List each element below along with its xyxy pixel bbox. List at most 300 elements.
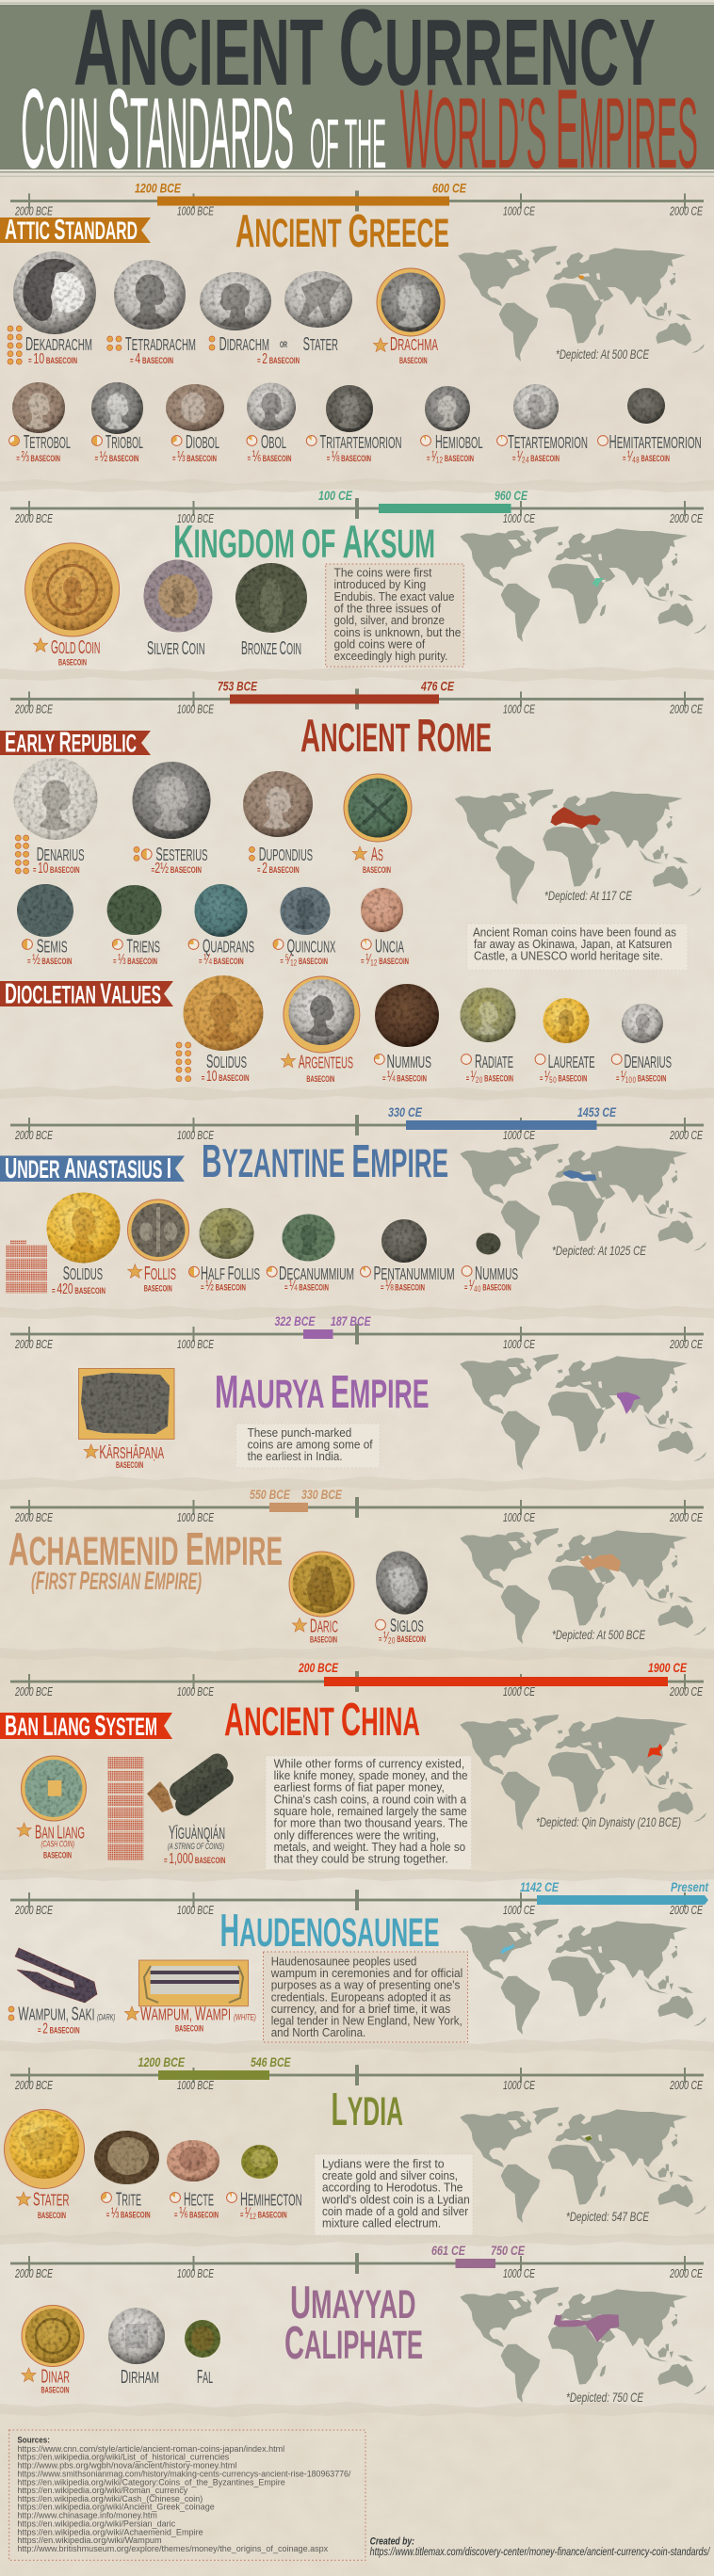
timeline: Achaemenid: 1000 CE — [503, 1511, 535, 1524]
coin: Denarius (Diocletian): DENARIUS — [624, 1052, 672, 1072]
coin: Quadrans: QUADRANS — [203, 936, 254, 957]
coin: Triobol: = ½ BASECOIN — [95, 449, 139, 465]
coin: Solidus = 420 basecoin — [6, 1192, 121, 1297]
coin: Tetartemorion: = ¹⁄₂₄ BASECOIN — [512, 449, 560, 465]
title banner: OF THE — [310, 105, 386, 183]
timeline: Byzantine: 1453 CE — [577, 1104, 616, 1119]
coin: Stater, basecoin: BASECOIN — [38, 2211, 66, 2221]
coin: Hecte: = ⅙ BASECOIN — [174, 2206, 219, 2222]
subheading: First Persian Empire: (FIRST PERSIAN EMPIRE) — [31, 1566, 202, 1595]
coin: Trite — [94, 2131, 159, 2222]
world map: China — [460, 1715, 706, 1830]
coin: Didrachm or Stater: DIDRACHM — [219, 334, 269, 355]
panel: Umayyad Caliphate — [10, 2243, 706, 2405]
coin: Hemiobol — [421, 386, 483, 465]
coin: As, basecoin: AS — [371, 845, 383, 865]
timeline: Haudenosaunee: 2000 BCE — [14, 1904, 53, 1917]
heading: Achaemenid Empire: ACHAEMENID EMPIRE — [8, 1524, 283, 1575]
coin: Fal: FAL — [197, 2367, 213, 2388]
timeline: China: 2000 BCE — [14, 1685, 53, 1699]
timeline: Umayyad: 750 CE — [491, 2243, 526, 2258]
text block: China note — [266, 1756, 471, 1870]
sources list: https://en.wikipedia.org/wiki/Cash_(Chinese_coin) — [17, 2494, 203, 2504]
coin: Dinar, basecoin: BASECOIN — [41, 2386, 70, 2396]
timeline: Lydia: 546 BCE — [251, 2054, 291, 2069]
timeline: Aksum: 960 CE — [495, 488, 527, 503]
coin: Bronze Coin: BRONZE COIN — [241, 638, 301, 659]
coin: Ban Liang, basecoin: BAN LIANG — [35, 1823, 85, 1843]
coin: Quincunx — [273, 887, 336, 968]
world map: Lydia — [460, 2107, 706, 2224]
wampum: Saki (dark): WAMPUM, SAKI — [18, 2004, 95, 2025]
coin: Obol: = ⅙ BASECOIN — [248, 449, 292, 465]
timeline: China: 200 BCE — [298, 1660, 338, 1675]
banner: Under Anastasius I: UNDER ANASTASIUS I — [5, 1151, 171, 1184]
coin: Nummus: NUMMUS — [386, 1052, 431, 1072]
timeline: Maurya: 1000 BCE — [177, 1338, 214, 1351]
coin: As, basecoin: BASECOIN — [363, 865, 391, 876]
timeline: Achaemenid: 330 BCE — [301, 1487, 342, 1502]
coin: Yiguanqian, string of coins: (A STRING OF COINS) — [168, 1842, 224, 1852]
coin: Yiguanqian, string of coins — [147, 1750, 237, 1867]
coin: Drachma, basecoin — [373, 268, 445, 366]
coin: Solidus = 420 basecoin: = 420 BASECOIN — [52, 1281, 105, 1297]
text block: China note: earliest forms of fiat paper money, — [274, 1780, 445, 1795]
coin: Uncia: UNCIA — [375, 936, 404, 957]
world map: Byzantine: *Depicted: At 1025 CE — [552, 1243, 646, 1258]
heading: Umayyad Caliphate: CALIPHATE — [284, 2318, 423, 2369]
timeline: Lydia — [10, 2054, 704, 2092]
text block: Lydia note: Lydians were the first to — [322, 2156, 445, 2170]
coin: Half Follis: = ½ BASECOIN — [201, 1279, 246, 1295]
panel: Ancient Rome — [0, 678, 704, 1086]
coin: Nummus — [374, 984, 439, 1086]
coin: Ban Liang, basecoin: (CASH COIN) — [41, 1840, 74, 1850]
heading: Umayyad Caliphate: UMAYYAD — [290, 2278, 416, 2328]
timeline: Aksum: 1000 BCE — [177, 512, 214, 525]
coin: Tetradrachm: TETRADRACHM — [125, 334, 196, 355]
timeline: Achaemenid — [10, 1487, 704, 1524]
coin: Dinar, basecoin — [22, 2305, 84, 2396]
coin: Hecte: HECTE — [184, 2190, 214, 2211]
coin: Solidus: = 10 BASECOIN — [202, 1069, 250, 1085]
coin: Follis, basecoin — [128, 1199, 188, 1295]
coin: Argenteus, basecoin: ARGENTEUS — [299, 1053, 353, 1073]
text block: Rome note: Ancient Roman coins have been found as — [473, 925, 676, 939]
coin: Dekadrachm: DEKADRACHM — [25, 334, 92, 355]
panel: Ancient Greece — [0, 181, 705, 465]
wampum: Wampi (white), basecoin: (WHITE) — [234, 2013, 256, 2023]
sources list: https://en.wikipedia.org/wiki/Roman_currency — [17, 2486, 188, 2496]
timeline: Umayyad: 1000 CE — [503, 2267, 535, 2280]
sources list: https://en.wikipedia.org/wiki/Ancient_Greek_coinage — [17, 2503, 215, 2513]
coin: Decanummium: DECANUMMIUM — [279, 1264, 354, 1284]
timeline: Achaemenid: 2000 BCE — [14, 1511, 53, 1524]
banner: Ban Liang System: BAN LIANG SYSTEM — [5, 1709, 157, 1742]
sources list: https://en.wikipedia.org/wiki/Persian_daric — [17, 2520, 175, 2530]
world map: Greece — [458, 246, 705, 362]
coin: Semis: = ½ BASECOIN — [27, 952, 72, 968]
text block: China note: for more than two thousand years. The — [274, 1816, 468, 1830]
banner: Attic Standard: ATTIC STANDARD — [5, 213, 138, 246]
timeline: Byzantine: 330 CE — [388, 1104, 423, 1119]
sources list: https://en.wikipedia.org/wiki/Wampum — [17, 2536, 162, 2546]
timeline: Lydia: 1000 BCE — [177, 2079, 214, 2092]
timeline: Haudenosaunee: 1000 BCE — [177, 1904, 214, 1917]
coin: Karshapana: BASECOIN — [116, 1460, 143, 1471]
coin: Hemitartemorion — [598, 388, 702, 465]
coin: Nummus: = ¼ BASECOIN — [382, 1070, 427, 1086]
coin: Dirham: DIRHAM — [121, 2367, 159, 2388]
timeline: Umayyad: 1000 BCE — [177, 2267, 214, 2280]
timeline: Umayyad — [10, 2243, 704, 2280]
sources list: https://en.wikipedia.org/wiki/Category:Coins_of_the_Byzantines_Empire — [17, 2477, 285, 2487]
text block: China note: that they could be strung together. — [274, 1852, 448, 1866]
text block: China note: square hole, remained largely the same — [274, 1804, 467, 1818]
coin: Nummus (Byzantine) — [462, 1233, 518, 1295]
coin: Half Follis: HALF FOLLIS — [201, 1264, 260, 1284]
heading: Kingdom of Aksum: KINGDOM OF AKSUM — [173, 517, 435, 568]
world map: Achaemenid: *Depicted: At 500 BCE — [552, 1627, 645, 1642]
heading: Ancient China: ANCIENT CHINA — [224, 1695, 420, 1746]
timeline: Lydia: 2000 BCE — [14, 2079, 53, 2092]
sources list — [17, 2444, 351, 2554]
timeline: Rome: 1000 CE — [503, 702, 535, 716]
text block: Aksum note: gold, silver, and bronze — [333, 613, 445, 627]
coin: Hecte — [167, 2140, 219, 2222]
coin: Diobol: = ⅓ BASECOIN — [172, 449, 217, 465]
wampum: Wampi (white), basecoin: WAMPUM, WAMPI — [140, 2004, 231, 2025]
coin: Solidus: SOLIDUS — [206, 1052, 247, 1072]
timeline: Byzantine: 1000 CE — [503, 1129, 535, 1142]
coin: Obol: OBOL — [261, 432, 286, 453]
text block: Lydia note: according to Herodotus. The — [322, 2181, 462, 2195]
timeline: China: 1900 CE — [648, 1660, 687, 1675]
coin: Ban Liang, basecoin — [17, 1756, 87, 1861]
panel: Kingdom of Aksum — [10, 488, 706, 668]
world map: Umayyad — [460, 2287, 706, 2405]
text block: China note: only differences were the writing, — [274, 1827, 439, 1842]
text block: Aksum note: gold coins were of — [333, 636, 426, 652]
sources list: https://en.wikipedia.org/wiki/List_of_historical_currencies — [17, 2453, 230, 2463]
timeline: Ancient Greece: 1000 CE — [503, 205, 535, 218]
wampum: Saki (dark) — [8, 1948, 115, 2037]
coin: Silver Coin — [143, 559, 213, 659]
coin: Didrachm or Stater: STATER — [303, 334, 338, 355]
timeline: Aksum: 100 CE — [318, 488, 353, 503]
coin: Stater, basecoin — [4, 2109, 85, 2221]
coin: Quadrans — [188, 884, 254, 968]
panel: sources — [9, 2430, 365, 2560]
text block: China note: China's cash coins, a round coin with a — [274, 1792, 467, 1806]
text block: Haudenosaunee note: and North Carolina. — [271, 2025, 365, 2039]
timeline: China — [10, 1660, 704, 1699]
coin: As, basecoin — [344, 774, 412, 876]
sources list: http://www.chinasage.info/money.htm — [17, 2511, 157, 2521]
text block: Aksum note: coins is unknown, but the — [333, 625, 462, 639]
coin: Quadrans: = ¼ BASECOIN — [199, 952, 244, 968]
coin: Siglos: = ¹⁄₂₀ BASECOIN — [379, 1630, 426, 1646]
coin: Karshapana — [79, 1369, 174, 1471]
coin: Gold Coin — [25, 543, 120, 668]
coin: Triobol — [91, 382, 143, 465]
timeline: Aksum: 1000 CE — [503, 512, 535, 525]
coin: Bronze Coin — [235, 563, 307, 659]
banner: Diocletian Values: DIOCLETIAN VALUES — [5, 977, 161, 1009]
panel: Haudenosaunee — [8, 1879, 709, 2042]
text block: Aksum note: introduced by King — [333, 577, 426, 591]
chart: 1,000 basecoin grid — [108, 1757, 143, 1860]
heading: Ancient Greece: ANCIENT GREECE — [235, 206, 449, 257]
timeline: China: 1000 CE — [503, 1685, 535, 1699]
panel: Maurya Empire — [10, 1313, 706, 1471]
wampum: Saki (dark): (DARK) — [97, 2013, 115, 2023]
coin: Hemiobol: HEMIOBOL — [435, 432, 483, 453]
coin: Dupondius — [243, 771, 313, 877]
coin: Denarius — [13, 758, 98, 877]
text block: Haudenosaunee note: wampum in ceremonies and for official — [270, 1966, 462, 1980]
coin: Gold Coin: BASECOIN — [58, 657, 87, 668]
coin: Radiate: = ¹⁄₂₀ BASECOIN — [466, 1070, 513, 1086]
timeline: Rome: 1000 BCE — [177, 702, 214, 716]
sources list: https://en.wikipedia.org/wiki/Achaemenid_Empire — [17, 2527, 203, 2537]
text block: Haudenosaunee note: currency, and for a brief time, it was — [271, 2002, 451, 2016]
coin: Daric, basecoin — [289, 1552, 354, 1646]
coin: Yiguanqian, string of coins: YĪGUÀNQIÁN — [169, 1823, 225, 1843]
timeline: Haudenosaunee — [10, 1879, 709, 1917]
coin: Semis: SEMIS — [37, 936, 68, 957]
timeline: Achaemenid: 1000 BCE — [177, 1511, 214, 1524]
coin: Tetrobol: TETROBOL — [24, 432, 71, 453]
coin: Nummus (Byzantine): NUMMUS — [475, 1264, 518, 1284]
timeline: Maurya: 322 BCE — [275, 1313, 316, 1328]
timeline: Umayyad: 2000 BCE — [14, 2267, 53, 2280]
coin: Hemihecton: = ¹⁄₁₂ BASECOIN — [240, 2206, 287, 2222]
coin: Karshapana: KĀRSHĀPAṆA — [99, 1442, 164, 1463]
coin: Quincunx: QUINCUNX — [287, 936, 336, 957]
timeline: Rome: 476 CE — [420, 678, 454, 693]
coin: Diobol — [166, 384, 224, 465]
text block: Haudenosaunee note: Haudenosaunee peoples used — [271, 1954, 416, 1968]
coin: Yiguanqian, string of coins: = 1,000 BASECOIN — [164, 1851, 225, 1867]
coin: Laureate: LAUREATE — [548, 1052, 595, 1072]
coin: Siglos — [369, 1545, 434, 1646]
timeline: Maurya: 187 BCE — [331, 1313, 371, 1328]
text block: Haudenosaunee note — [264, 1952, 467, 2042]
timeline: Lydia: 1000 CE — [503, 2079, 535, 2092]
coin: Semis — [17, 884, 73, 968]
coin: Triens — [107, 885, 162, 968]
world map: Achaemenid — [460, 1528, 706, 1644]
text block: Maurya note — [235, 1424, 380, 1468]
timeline: Haudenosaunee: 1142 CE — [520, 1879, 560, 1894]
text block: Aksum note: of the three issues of — [333, 601, 441, 616]
text block: Lydia note: world's oldest coin is a Lydian — [321, 2192, 470, 2206]
text block: Maurya note: the earliest in India. — [248, 1449, 343, 1463]
timeline: Byzantine: 2000 BCE — [14, 1129, 53, 1142]
coin: Dupondius: DUPONDIUS — [259, 845, 313, 865]
sources list: https://www.cnn.com/style/article/ancient-roman-coins-japan/index.html — [17, 2444, 284, 2455]
world map: Roman Empire: *Depicted: At 117 CE — [544, 888, 632, 903]
timeline: Rome — [10, 678, 704, 716]
timeline: Maurya: 1000 CE — [503, 1338, 535, 1351]
coin: Tritartemorion: TRITARTEMORION — [320, 432, 401, 453]
coin: Uncia: = ¹⁄₁₂ BASECOIN — [361, 952, 409, 968]
coin: Decanummium — [267, 1215, 354, 1295]
timeline: Maurya: 2000 BCE — [14, 1338, 53, 1351]
coin: Triobol: TRIOBOL — [105, 432, 143, 453]
coin: Drachma, basecoin: BASECOIN — [399, 356, 428, 366]
coin: Didrachm or Stater: = 2 BASECOIN — [257, 351, 300, 367]
world map: Greece: *Depicted: At 500 BCE — [556, 346, 649, 362]
coin: Trite: TRITE — [116, 2190, 141, 2211]
coin: Tetrobol — [9, 382, 71, 465]
sources list: http://www.pbs.org/wgbh/nova/ancient/history-money.html — [17, 2461, 236, 2471]
timeline: Maurya — [10, 1313, 704, 1351]
coin: Denarius (Diocletian): = ¹⁄₁₀₀ BASECOIN — [616, 1070, 666, 1086]
timeline: Haudenosaunee: 1000 CE — [503, 1904, 535, 1917]
panel: Ancient China — [0, 1660, 706, 1870]
text block: Haudenosaunee note: legal tender in New England, New York, — [271, 2013, 462, 2027]
wampum: Wampi (white), basecoin: BASECOIN — [175, 2024, 203, 2035]
text block: Lydia note: mixture called electrum. — [322, 2215, 441, 2230]
panel: Byzantine Empire — [0, 1104, 706, 1297]
timeline: Ancient Greece — [10, 181, 704, 218]
world map: Roman Empire — [455, 789, 701, 905]
timeline: Aksum — [10, 488, 704, 525]
wampum: Saki (dark): = 2 BASECOIN — [38, 2021, 80, 2037]
timeline: Rome: 753 BCE — [218, 678, 257, 693]
timeline: Ancient Greece: 600 CE — [432, 181, 467, 196]
panel: Achaemenid Empire — [8, 1487, 706, 1646]
text block: Haudenosaunee note: purposes as a way of presenting one's — [271, 1978, 461, 1992]
coin: Hemiobol: = ¹⁄₁₂ BASECOIN — [427, 449, 474, 465]
text block: Haudenosaunee note: credentials. Europeans adopted it as — [271, 1989, 451, 2004]
timeline: Umayyad: 661 CE — [431, 2243, 466, 2258]
coin: Tetartemorion: TETARTEMORION — [508, 432, 588, 453]
sources list: http://www.britishmuseum.org/explore/themes/money/the_origins_of_coinage.aspx — [17, 2544, 328, 2554]
world map: Umayyad: *Depicted: 750 CE — [566, 2390, 643, 2405]
timeline: Rome: 2000 BCE — [14, 702, 53, 716]
coin: Dinar, basecoin: DINAR — [41, 2367, 70, 2388]
text block: Lydia note: create gold and silver coins, — [322, 2168, 458, 2182]
coin: Trite: = ⅓ BASECOIN — [106, 2206, 151, 2222]
coin: Pentanummium: PENTANUMMIUM — [373, 1264, 455, 1284]
panel: Lydia — [4, 2054, 706, 2235]
coin: Nummus (Byzantine): = ¹⁄₄₀ BASECOIN — [464, 1279, 511, 1295]
heading: Lydia: LYDIA — [332, 2085, 403, 2135]
credit — [370, 2536, 711, 2558]
title banner: COIN STANDARDS — [21, 66, 294, 192]
coin: Ban Liang, basecoin: BASECOIN — [43, 1851, 72, 1861]
timeline: Byzantine — [10, 1104, 704, 1142]
text block: China note: like knife money, spade money, and the — [274, 1768, 468, 1782]
coin: Didrachm or Stater — [200, 271, 352, 367]
timeline: Ancient Greece: 1200 BCE — [135, 181, 182, 196]
coin: Denarius: DENARIUS — [37, 845, 85, 865]
coin: Sesterius — [132, 762, 211, 877]
coin: Solidus — [176, 975, 264, 1085]
coin: Argenteus, basecoin — [281, 976, 360, 1085]
timeline: Achaemenid: 550 BCE — [250, 1487, 290, 1502]
coin: Radiate: RADIATE — [475, 1052, 513, 1072]
coin: Hemihecton — [227, 2145, 302, 2222]
text block: Rome note: far away as Okinawa, Japan, at Katsuren — [474, 937, 672, 951]
timeline: China: 1000 BCE — [177, 1685, 214, 1699]
coin: Hemitartemorion: = ¹⁄₄₈ BASECOIN — [623, 449, 670, 465]
coin: Siglos: SIGLOS — [390, 1616, 424, 1636]
coin: Tetradrachm — [107, 260, 196, 367]
timeline: Ancient Greece: 2000 BCE — [14, 205, 53, 218]
timeline: Lydia: 1200 BCE — [138, 2054, 186, 2069]
coin: Follis, basecoin: FOLLIS — [144, 1264, 176, 1284]
text block: Lydia note — [315, 2154, 473, 2235]
world map: Maurya — [460, 1354, 706, 1470]
heading: Byzantine Empire: BYZANTINE EMPIRE — [202, 1136, 448, 1187]
text block: Aksum note: The coins were first — [333, 566, 432, 580]
coin: Hemihecton: HEMIHECTON — [240, 2190, 302, 2211]
world map: Byzantine — [460, 1144, 706, 1260]
title banner — [0, 0, 714, 192]
coin: Didrachm or Stater: OR — [280, 340, 287, 350]
coin: Triens: = ⅓ BASECOIN — [113, 952, 157, 968]
timeline: Ancient Greece: 1000 BCE — [177, 205, 214, 218]
world map: Haudenosaunee — [460, 1919, 706, 2035]
coin: Tetrobol: = ⅔ BASECOIN — [16, 449, 60, 465]
text block: Maurya note: coins are among some of — [248, 1438, 373, 1452]
text block: China note: metals, and weight. They had a hole so — [274, 1840, 465, 1854]
world map: Aksum — [460, 526, 706, 642]
coin: Diobol: DIOBOL — [186, 432, 219, 453]
coin: Fal — [185, 2320, 220, 2388]
coin: Follis, basecoin: BASECOIN — [144, 1284, 172, 1295]
coin: Dirham — [108, 2308, 165, 2388]
banner: Early Republic: EARLY REPUBLIC — [5, 725, 137, 759]
heading: Ancient Rome: ANCIENT ROME — [300, 711, 492, 762]
coin: Dupondius: = 2 BASECOIN — [257, 861, 300, 877]
coin: Drachma, basecoin: DRACHMA — [390, 334, 438, 355]
coin: Tetartemorion — [497, 384, 588, 465]
sources heading: Sources: — [17, 2435, 50, 2445]
coin: Denarius (Diocletian) — [611, 1004, 672, 1086]
coin: Triens: TRIENS — [126, 936, 160, 957]
coin: Argenteus, basecoin: BASECOIN — [306, 1074, 334, 1085]
text block: Aksum note: exceedingly high purity. — [333, 649, 447, 663]
heading: Haudenosaunee: HAUDENOSAUNEE — [220, 1906, 439, 1956]
world map: Lydia: *Depicted: 547 BCE — [566, 2209, 649, 2224]
coin: Tritartemorion: = ⅛ BASECOIN — [327, 449, 371, 465]
text block: Rome note — [467, 924, 688, 971]
coin: Dekadrachm — [8, 251, 96, 367]
coin: Dekadrachm: = 10 BASECOIN — [28, 351, 77, 367]
coin: Solidus = 420 basecoin: SOLIDUS — [63, 1264, 103, 1284]
coin: Denarius: = 10 BASECOIN — [33, 861, 80, 877]
coin: Daric, basecoin: DARIC — [310, 1617, 338, 1637]
coin: Radiate — [460, 988, 516, 1086]
coin: Quincunx: = ⁵⁄₁₂ BASECOIN — [280, 952, 328, 968]
heading: Maurya Empire: MAURYA EMPIRE — [215, 1367, 430, 1418]
timeline: Byzantine: 1000 BCE — [177, 1129, 214, 1142]
heading: Umayyad Caliphate — [284, 2278, 423, 2369]
text block: China note: While other forms of currency existed, — [274, 1756, 464, 1770]
coin: Half Follis — [189, 1208, 260, 1295]
coin: Daric, basecoin: BASECOIN — [310, 1635, 337, 1646]
coin: Obol — [247, 382, 296, 465]
text block: Lydia note: coin made of a gold and silver — [322, 2204, 469, 2218]
coin: Pentanummium: = ⅛ BASECOIN — [381, 1279, 425, 1295]
coin: Sesterius: SESTERIUS — [155, 845, 207, 865]
coin: Gold Coin: GOLD COIN — [51, 637, 100, 658]
